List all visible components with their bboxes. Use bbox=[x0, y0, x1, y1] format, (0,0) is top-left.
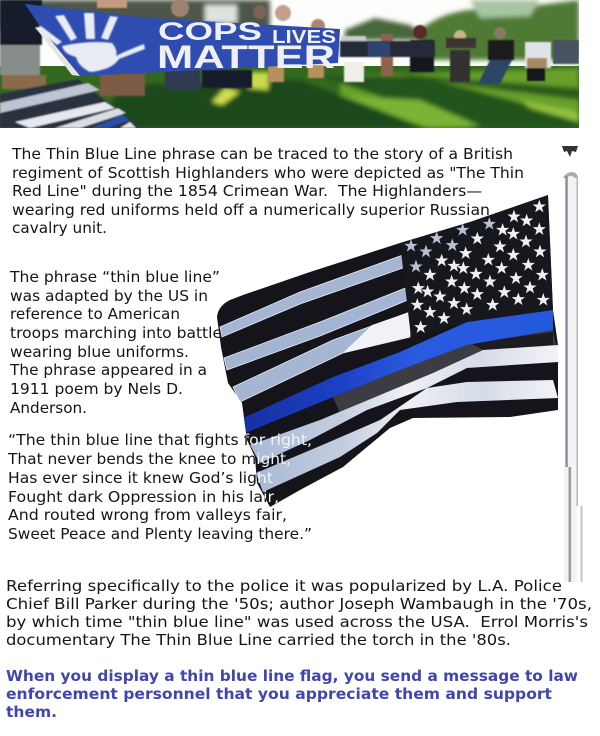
poem words overlapping the flag, drawn white: Fought dark Oppression in his lair, bbox=[8, 489, 279, 506]
closing call-out in bold blue: them. bbox=[6, 704, 57, 721]
paragraph: police popularisation bbox=[6, 578, 592, 649]
poem quotation: “The thin blue line that fights for right, bbox=[8, 432, 312, 449]
closing call-out in bold blue: enforcement personnel that you appreciate them and support bbox=[6, 686, 552, 703]
paragraph: police popularisation: by which time "thin blue line" was used across the USA. Errol Morris's bbox=[6, 614, 588, 631]
poem words overlapping the flag, drawn white bbox=[246, 434, 310, 504]
poem quotation: Has ever since it knew God’s light bbox=[8, 470, 273, 487]
intro paragraph: The Thin Blue Line phrase can be traced to the story of a British bbox=[11, 146, 513, 163]
intro paragraph: wearing red uniforms held off a numerically superior Russian bbox=[12, 202, 490, 219]
poem words overlapping the flag, drawn white: “The thin blue line that fights for right, bbox=[8, 432, 312, 449]
flag stars bbox=[404, 200, 550, 333]
black canton bbox=[400, 195, 553, 337]
grass light patches and shadows bbox=[340, 68, 579, 128]
banner: LIVES bbox=[272, 27, 336, 47]
poem quotation bbox=[7, 432, 312, 543]
striped flag on the ground bbox=[0, 79, 140, 128]
photo: rally with Cops Lives Matter banner bbox=[0, 0, 579, 128]
crowd bbox=[0, 0, 579, 96]
icon: pole finial bbox=[562, 146, 578, 157]
poem quotation: Fought dark Oppression in his lair, bbox=[8, 489, 279, 506]
paragraph: adaptation in the US: The phrase “thin blue line” bbox=[9, 269, 220, 286]
paragraph: adaptation in the US: was adapted by the US in bbox=[10, 288, 208, 305]
closing call-out in bold blue: When you display a thin blue line flag, you send a message to law bbox=[6, 668, 578, 685]
paragraph: adaptation in the US: wearing blue uniforms. bbox=[10, 344, 189, 361]
paragraph: police popularisation: documentary The Thin Blue Line carried the torch in the '80s. bbox=[6, 632, 511, 649]
thin blue line flag bbox=[217, 195, 558, 507]
paragraph: police popularisation: Chief Bill Parker during the '50s; author Joseph Wambaugh in the '70s, bbox=[6, 596, 592, 613]
thin blue line bbox=[243, 310, 553, 434]
poem quotation: And routed wrong from valleys fair, bbox=[8, 507, 287, 524]
poem words overlapping the flag, drawn white: Has ever since it knew God’s light bbox=[8, 470, 273, 487]
banner text: COPS LIVES MATTER: COPS bbox=[158, 18, 262, 46]
flag pole bbox=[563, 172, 582, 582]
paragraph: adaptation in the US: The phrase appeared in a bbox=[9, 362, 207, 379]
grey-blue stripes bbox=[220, 255, 403, 337]
closing call-out in bold blue bbox=[6, 668, 578, 721]
dark grey band below the blue line bbox=[333, 330, 556, 413]
poem quotation: Sweet Peace and Plenty leaving there.” bbox=[8, 526, 312, 543]
paragraph: adaptation in the US: troops marching into battle bbox=[10, 325, 222, 342]
poem quotation: That never bends the knee to might, bbox=[7, 451, 291, 468]
poem words overlapping the flag, drawn white: That never bends the knee to might, bbox=[7, 451, 291, 468]
intro paragraph: cavalry unit. bbox=[12, 220, 107, 237]
paragraph: police popularisation: Referring specifically to the police it was popularized by L.A. Police bbox=[6, 578, 562, 595]
intro paragraph bbox=[11, 146, 524, 237]
icon: white hand print bbox=[35, 13, 145, 72]
banner bbox=[25, 4, 340, 76]
paragraph: adaptation in the US: 1911 poem by Nels D. bbox=[10, 381, 183, 398]
paragraph: adaptation in the US bbox=[9, 269, 222, 417]
paragraph: adaptation in the US: reference to American bbox=[10, 306, 180, 323]
banner: MATTER bbox=[157, 39, 335, 75]
flag black field bbox=[210, 190, 562, 515]
white stripes bbox=[250, 345, 558, 463]
intro paragraph: Red Line" during the 1854 Crimean War. The Highlanders— bbox=[12, 183, 482, 200]
paragraph: adaptation in the US: Anderson. bbox=[10, 400, 87, 417]
intro paragraph: regiment of Scottish Highlanders who were depicted as "The Thin bbox=[12, 165, 524, 182]
